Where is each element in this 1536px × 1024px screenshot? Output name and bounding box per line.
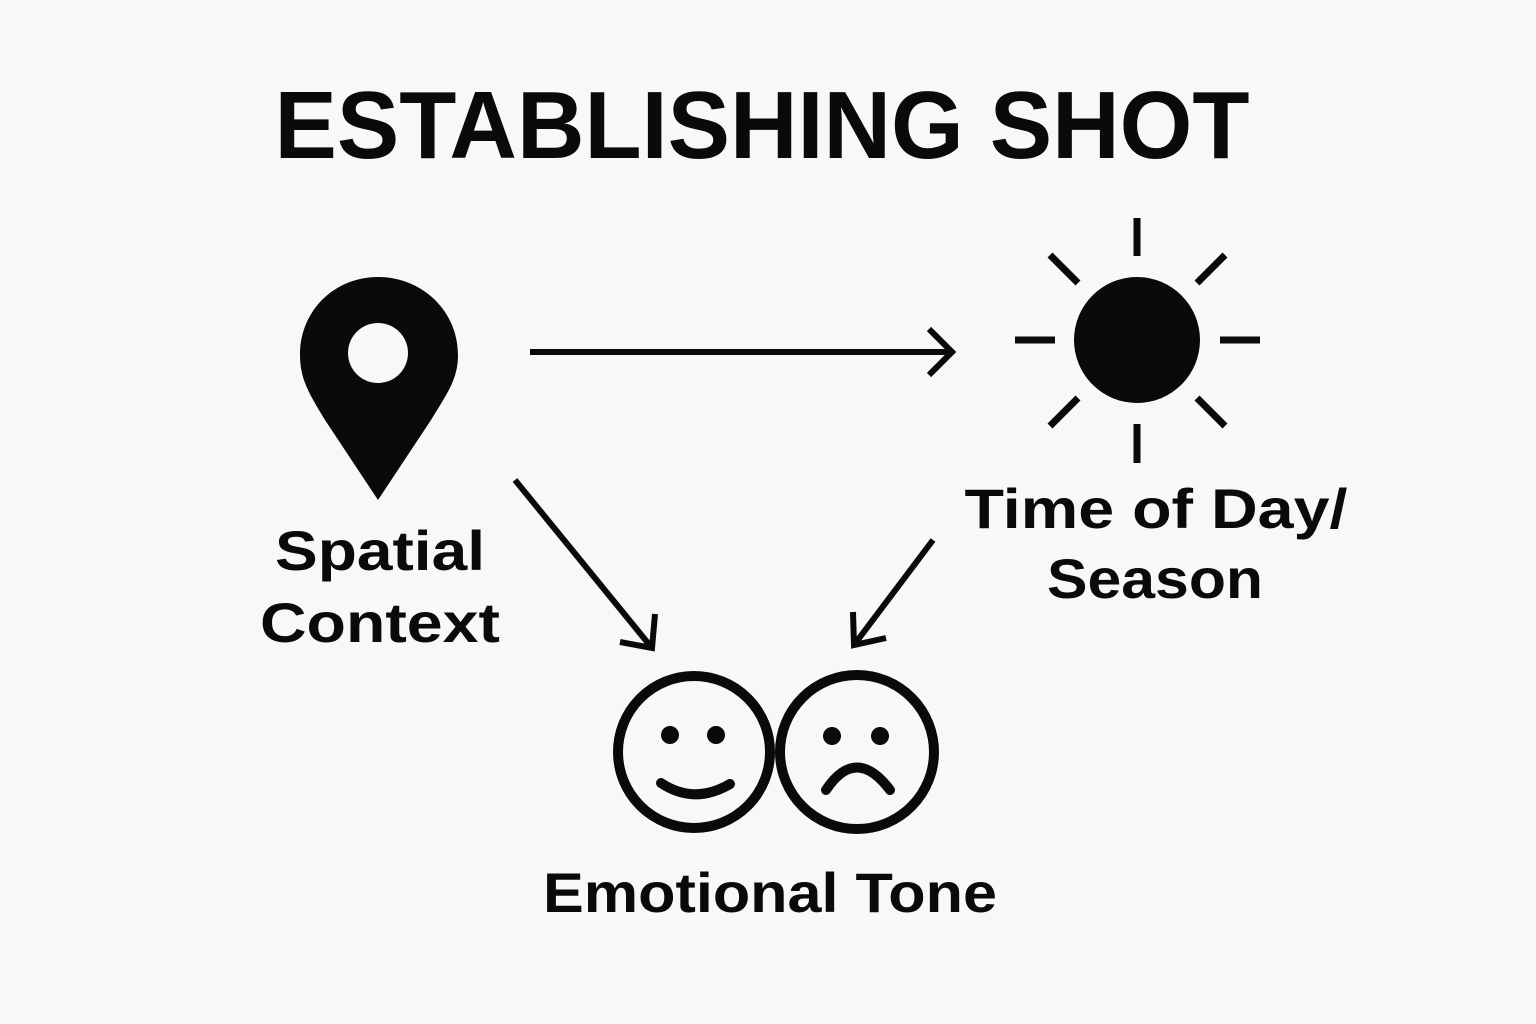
arrow: spatial to emotion — [515, 480, 655, 648]
icon: happy face — [618, 676, 770, 828]
label: emotional tone: Emotional Tone — [543, 861, 997, 924]
label: spatial context: Spatial — [275, 519, 485, 582]
icon: sad face — [780, 675, 934, 829]
icon: location pin — [300, 277, 458, 500]
label: time of day / season: Time of Day/ — [964, 477, 1348, 540]
label: spatial context: Context — [260, 591, 500, 654]
title: ESTABLISHING SHOT — [274, 72, 1250, 179]
icon: sun — [1015, 218, 1260, 463]
arrow: spatial to time — [530, 329, 952, 375]
label: time of day / season: Season — [1047, 547, 1263, 610]
arrow: time to emotion — [853, 540, 933, 645]
label: time of day / season — [964, 477, 1348, 610]
label: spatial context — [260, 519, 500, 654]
